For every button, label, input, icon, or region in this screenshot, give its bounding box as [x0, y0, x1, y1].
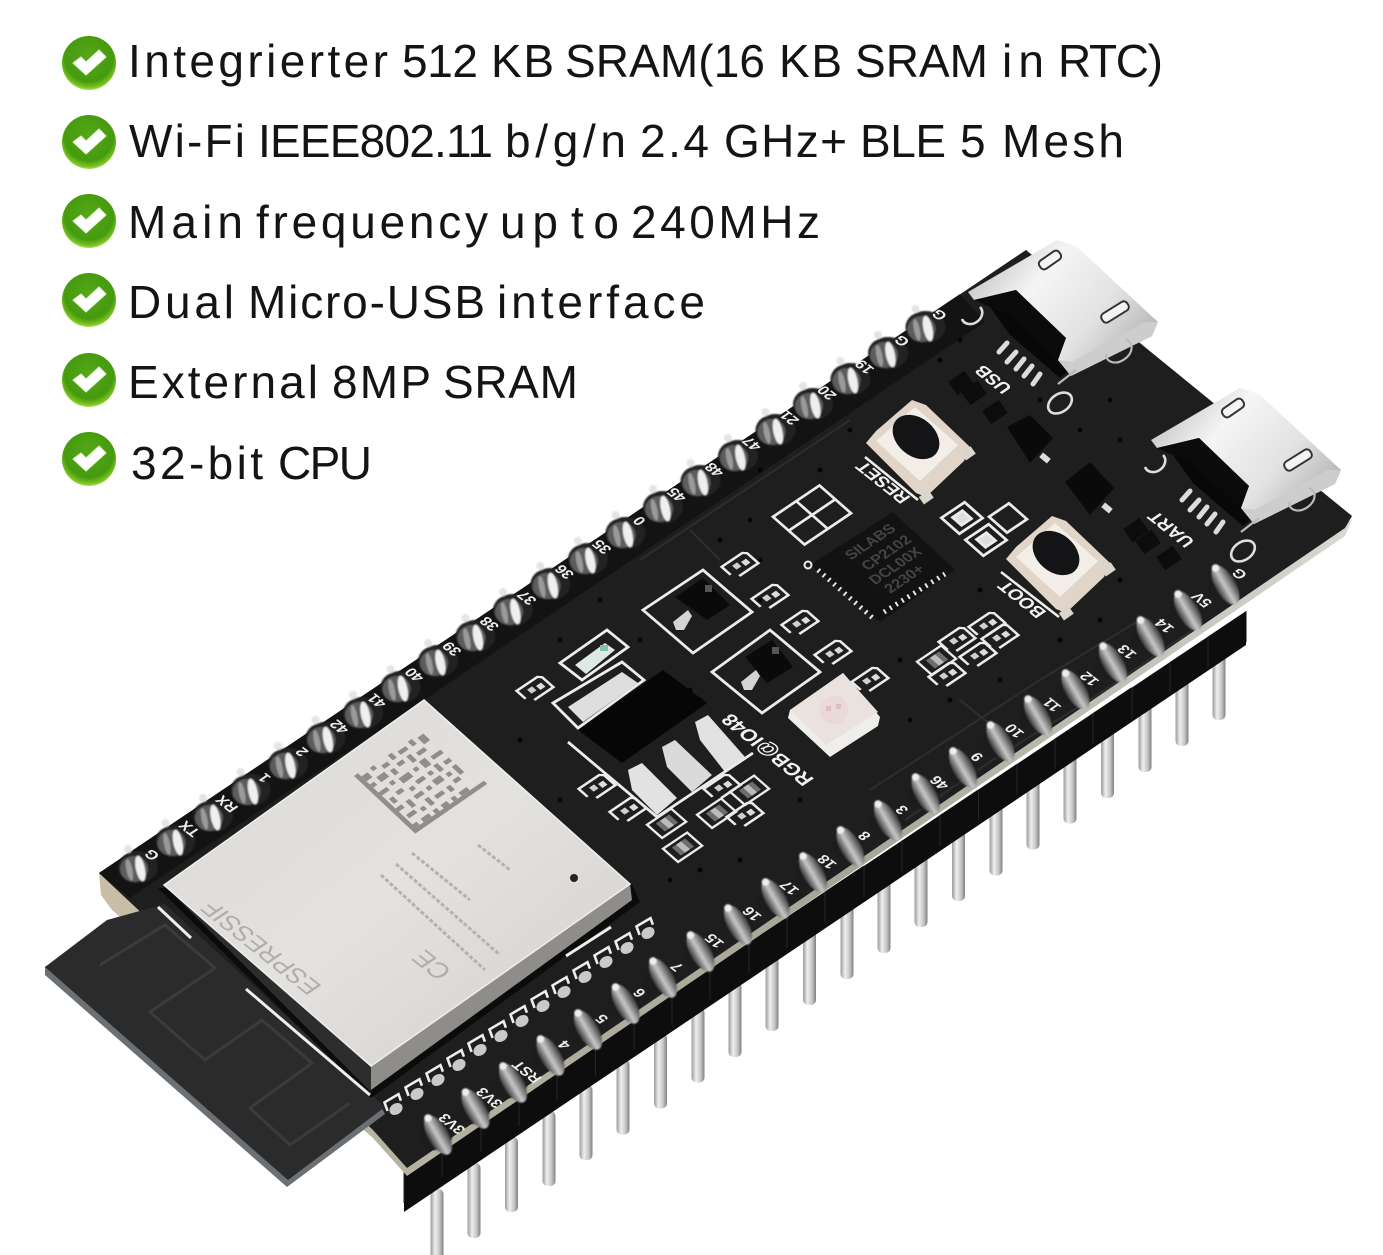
bottom pin labels: 17 — [776, 878, 803, 897]
top pin labels: 40 — [401, 665, 428, 684]
bottom pin labels: 13 — [1114, 642, 1141, 661]
BOOT button — [1006, 516, 1116, 621]
bottom pin labels: 9 — [967, 749, 988, 764]
button silk lines — [865, 457, 1059, 617]
feature: frequency: Main — [128, 196, 243, 248]
feature: USB: Dual — [128, 276, 234, 328]
feature: CPU: 32-bit — [131, 437, 263, 489]
bottom pin labels: 5 — [592, 1011, 613, 1026]
feature: SRAM: in — [1002, 35, 1044, 87]
feature: frequency — [62, 194, 820, 248]
top pin labels: 2 — [292, 744, 313, 759]
top pin labels: 1 — [254, 770, 275, 785]
feature: SRAM: RTC) — [1058, 35, 1163, 87]
feature: SRAM: SRAM(16 — [565, 35, 765, 87]
bottom pin labels: 16 — [739, 904, 766, 923]
feature: wireless: Wi-Fi — [129, 115, 245, 167]
RESET label: RESET — [851, 458, 915, 507]
feature: SRAM — [62, 35, 1163, 90]
feature: frequency: up — [500, 196, 558, 248]
top pin labels: 35 — [589, 537, 616, 556]
top pin labels: 41 — [364, 691, 391, 710]
top pin labels: 45 — [664, 485, 691, 504]
top pin labels — [141, 306, 951, 863]
top pin labels: 37 — [514, 588, 541, 607]
bottom solder joints — [418, 561, 1245, 1159]
feature: USB: Micro-USB — [248, 276, 485, 328]
feature: frequency: 240MHz — [631, 196, 820, 248]
bottom pin labels: 12 — [1076, 669, 1103, 688]
CP2102 USB bridge chip: CP2102 — [858, 532, 915, 574]
QR code — [354, 726, 487, 834]
bottom pin labels: 3V3 — [472, 1084, 507, 1111]
status LED — [560, 630, 628, 680]
top pin labels: G — [928, 306, 951, 323]
top pin labels: 19 — [851, 357, 878, 376]
development board — [45, 240, 1352, 1255]
top pin labels: 38 — [476, 614, 503, 633]
feature: USB — [62, 273, 705, 328]
CP2102 USB bridge chip — [804, 512, 955, 622]
module castellated pads — [383, 918, 657, 1118]
bottom pin labels: 6 — [629, 985, 650, 1000]
feature: wireless: 2.4 — [640, 115, 709, 167]
USB label: USB — [970, 362, 1016, 397]
feature: wireless: 5 — [960, 115, 986, 167]
feature: external memory: External — [128, 356, 318, 408]
header plastic blocks — [404, 611, 1246, 1203]
RESET button — [866, 400, 976, 505]
top pin labels: G — [891, 332, 914, 349]
bottom pin labels: 46 — [926, 773, 953, 792]
feature: CPU — [62, 432, 372, 489]
bottom pin labels — [435, 565, 1251, 1137]
BOOT label: BOOT — [993, 578, 1051, 621]
top pin labels: 39 — [439, 639, 466, 658]
feature: wireless: IEEE802.11 — [258, 115, 493, 167]
feature: SRAM: KB — [491, 35, 554, 87]
header plastic band — [404, 612, 1246, 1212]
feature: frequency: frequency — [256, 196, 488, 248]
bottom pin labels: 7 — [667, 959, 688, 974]
top pin labels: TX — [175, 818, 204, 839]
shield brand: ESPRESSIF — [195, 896, 328, 999]
CP2102 USB bridge chip: DCL00X — [865, 544, 926, 588]
diodes — [1007, 415, 1114, 515]
bottom pin labels: G — [1228, 565, 1251, 582]
feature: wireless: b/g/n — [505, 115, 626, 167]
top pin labels: 36 — [551, 562, 578, 581]
small transistors near USB — [948, 371, 1182, 570]
shield marking lines — [381, 845, 510, 970]
bottom pin labels: RST — [509, 1057, 546, 1086]
CP2102 USB bridge chip: SILABS — [841, 521, 900, 563]
ESP32 module shield — [158, 700, 640, 1098]
feature: wireless: BLE — [860, 115, 946, 167]
feature: USB: interface — [497, 276, 705, 328]
top pin labels: 48 — [701, 460, 728, 479]
bottom pin labels: 3V3 — [435, 1110, 470, 1137]
top solder joints — [118, 305, 946, 883]
feature: external memory: 8MP — [332, 356, 431, 408]
UART connector — [1145, 388, 1341, 566]
RGB LED silk label: RGB@IO48 — [717, 710, 819, 789]
voltage regulator — [553, 662, 753, 817]
top pin labels: 20 — [814, 383, 841, 402]
feature list — [62, 35, 1163, 489]
top pin labels: RX — [212, 792, 242, 815]
UART label: UART — [1143, 508, 1199, 550]
silkscreen component outlines — [517, 485, 1027, 862]
feature: external memory — [62, 353, 578, 408]
top pin labels: G — [141, 846, 164, 863]
feature: SRAM: 512 — [402, 35, 478, 87]
feature: frequency: to — [571, 196, 619, 248]
feature: wireless: GHz+ — [724, 115, 847, 167]
PCB traces and vias — [520, 340, 1200, 880]
bottom pin labels: 4 — [554, 1037, 575, 1052]
feature: wireless: Mesh — [1002, 115, 1124, 167]
top pin labels: 42 — [326, 717, 353, 736]
bottom pin labels: 10 — [1001, 721, 1028, 740]
PCB edge — [99, 520, 1352, 1176]
feature: wireless — [62, 115, 1124, 169]
feature: SRAM: SRAM — [855, 35, 988, 87]
bottom pin labels: 8 — [854, 828, 875, 843]
CP2102 USB bridge chip: 2230+ — [881, 561, 929, 596]
bottom pin labels: 15 — [701, 931, 728, 950]
top pin labels: 47 — [739, 434, 766, 453]
bottom pin labels: 14 — [1151, 615, 1178, 635]
dark header band along the top edge — [99, 294, 985, 898]
SOT transistor two — [712, 630, 820, 713]
header pins — [430, 645, 1226, 1255]
feature: SRAM: KB — [779, 35, 842, 87]
bottom pin labels: 18 — [814, 852, 841, 871]
bottom pin labels: 11 — [1039, 695, 1066, 714]
SOT transistor one — [643, 570, 752, 653]
CE mark: CE — [405, 945, 458, 985]
RGB LED — [788, 673, 880, 757]
antenna — [45, 904, 385, 1187]
PCB face — [99, 250, 1352, 1168]
top pin labels: 0 — [629, 513, 650, 528]
feature: SRAM: Integrierter — [128, 35, 388, 87]
feature: CPU: CPU — [278, 437, 372, 489]
bottom pin labels: 3 — [892, 802, 913, 817]
bottom pin labels: 5V — [1188, 589, 1216, 610]
feature: external memory: SRAM — [443, 356, 578, 408]
USB connector — [962, 240, 1158, 418]
top pin labels: 21 — [776, 408, 803, 427]
